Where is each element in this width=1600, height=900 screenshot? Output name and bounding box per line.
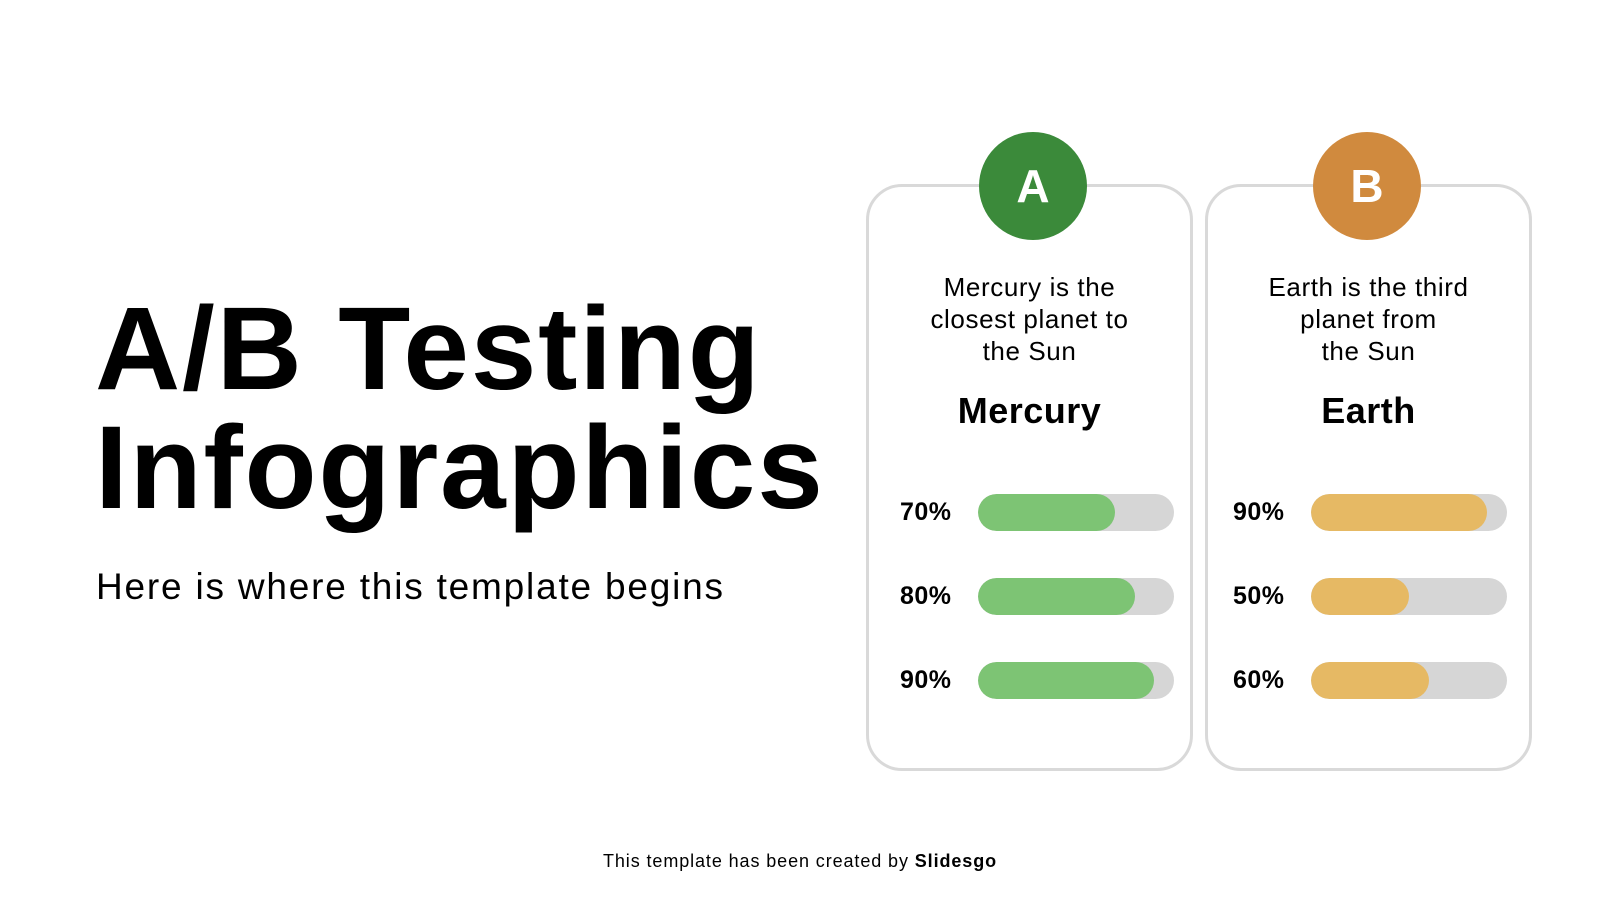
- heading: Earth: Earth: [1321, 390, 1416, 431]
- bar A3: [900, 662, 1174, 699]
- title: A/B Testing: [95, 283, 762, 415]
- bar A3: 90%: [900, 666, 952, 694]
- text: A description: [930, 272, 1129, 366]
- text: B description: Earth is the third: [1268, 272, 1469, 302]
- bar A2: 80%: [900, 582, 952, 610]
- icon: B circle: B: [1350, 160, 1384, 212]
- bar B3: 60%: [1233, 666, 1285, 694]
- title: Infographics: [95, 402, 825, 534]
- bar B3: [1233, 662, 1507, 699]
- bars B: [1233, 494, 1507, 699]
- bar B1: 90%: [1233, 498, 1285, 526]
- bar A2: [900, 578, 1174, 615]
- subtitle: Here is where this template begins: [96, 566, 725, 607]
- bar B2: [1233, 578, 1507, 615]
- text: B description: planet from: [1300, 304, 1437, 334]
- title: [95, 283, 825, 534]
- panel: A card: [866, 184, 1193, 771]
- footer: This template has been created by Slidesgo: [603, 851, 997, 871]
- icon: A circle: [979, 132, 1087, 240]
- bar A1: 70%: [900, 498, 952, 526]
- bar B2: 50%: [1233, 582, 1285, 610]
- icon: B circle: [1313, 132, 1421, 240]
- icon: A circle: A: [1016, 160, 1050, 212]
- bars A: [900, 494, 1174, 699]
- text: B description: the Sun: [1322, 336, 1415, 366]
- text: A description: closest planet to: [930, 304, 1129, 334]
- bar A1: [900, 494, 1174, 531]
- text: A description: Mercury is the: [944, 272, 1115, 302]
- text: B description: [1268, 272, 1469, 366]
- text: A description: the Sun: [983, 336, 1076, 366]
- panel: B card: [1205, 184, 1532, 771]
- heading: Mercury: Mercury: [958, 390, 1101, 431]
- bar B1: [1233, 494, 1507, 531]
